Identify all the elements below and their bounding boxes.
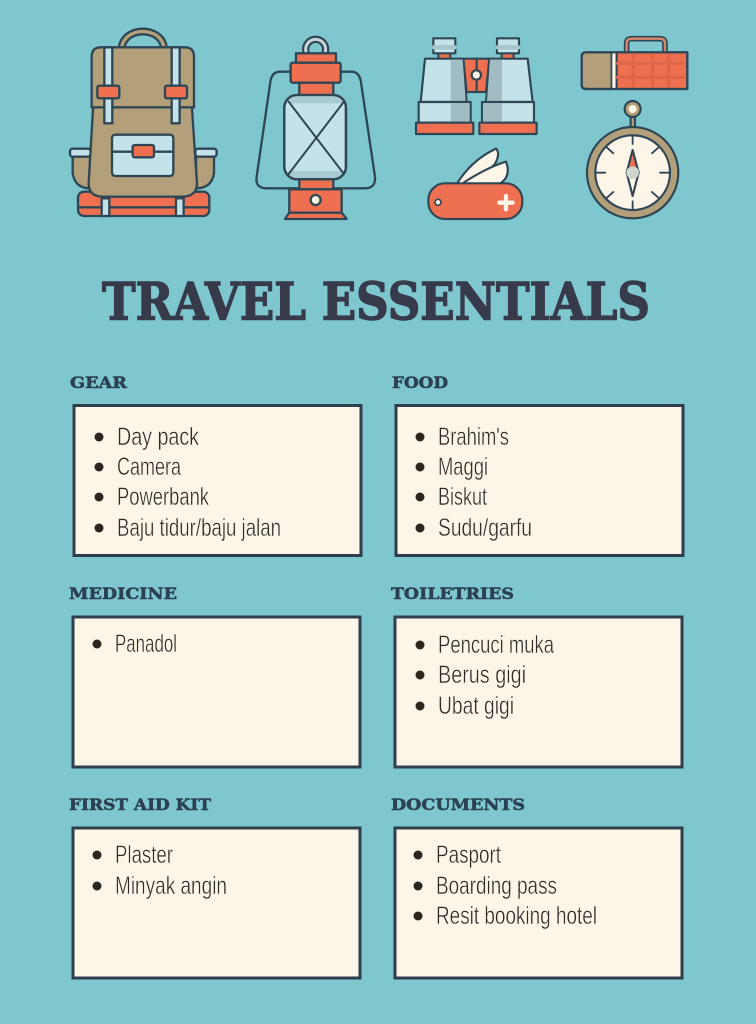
panel: first aid kit (69, 795, 360, 978)
first aid list box (73, 828, 360, 978)
heading: toiletries: TOILETRIES (391, 584, 514, 603)
documents items: Pasport (436, 841, 501, 869)
icon: lantern (256, 39, 375, 219)
heading: first aid kit: FIRST AID KIT (69, 795, 211, 814)
medicine list box (73, 617, 360, 767)
first aid bullets (92, 850, 102, 890)
documents list box (395, 828, 682, 978)
gear items: Camera (117, 453, 181, 481)
icon: backpack (70, 31, 217, 216)
panel: toiletries (391, 584, 682, 767)
medicine items: Panadol (115, 630, 177, 658)
icon: compass (587, 101, 678, 218)
panel: documents (391, 795, 682, 978)
heading: gear: GEAR (70, 373, 127, 392)
heading: medicine: MEDICINE (69, 584, 177, 603)
food bullets (416, 432, 424, 532)
documents bullets (414, 850, 422, 920)
panel: food (392, 373, 683, 556)
food list box (396, 406, 683, 556)
food items: Sudu/garfu (438, 514, 532, 542)
documents items: Resit booking hotel (436, 902, 597, 930)
gear items (117, 423, 281, 542)
panel: medicine (69, 584, 360, 767)
gear items: Baju tidur/baju jalan (117, 514, 281, 542)
toiletries items: Ubat gigi (438, 692, 514, 720)
toiletries items (438, 631, 554, 720)
icon: binoculars (416, 38, 537, 134)
gear list box (74, 406, 361, 556)
heading: food: FOOD (392, 373, 448, 392)
panel: gear (70, 373, 361, 556)
toiletries items: Berus gigi (438, 661, 526, 689)
documents items (436, 841, 597, 930)
gear items: Powerbank (117, 483, 209, 511)
food items: Brahim's (438, 423, 509, 451)
heading: documents: DOCUMENTS (391, 795, 525, 814)
icon: flashlight (582, 39, 687, 89)
food items (438, 423, 532, 542)
documents items: Boarding pass (436, 872, 557, 900)
first aid items: Plaster (115, 841, 173, 869)
toiletries list box (395, 617, 682, 767)
gear bullets (94, 432, 104, 532)
gear items: Day pack (117, 423, 199, 451)
food items: Maggi (438, 453, 488, 481)
toiletries bullets (416, 640, 424, 710)
first aid items: Minyak angin (115, 872, 227, 900)
title: TRAVEL ESSENTIALS (102, 272, 650, 332)
toiletries items: Pencuci muka (438, 631, 554, 659)
medicine bullet (92, 640, 102, 648)
icon: pocket knife (428, 149, 522, 219)
first aid items (115, 841, 227, 900)
food items: Biskut (438, 483, 487, 511)
